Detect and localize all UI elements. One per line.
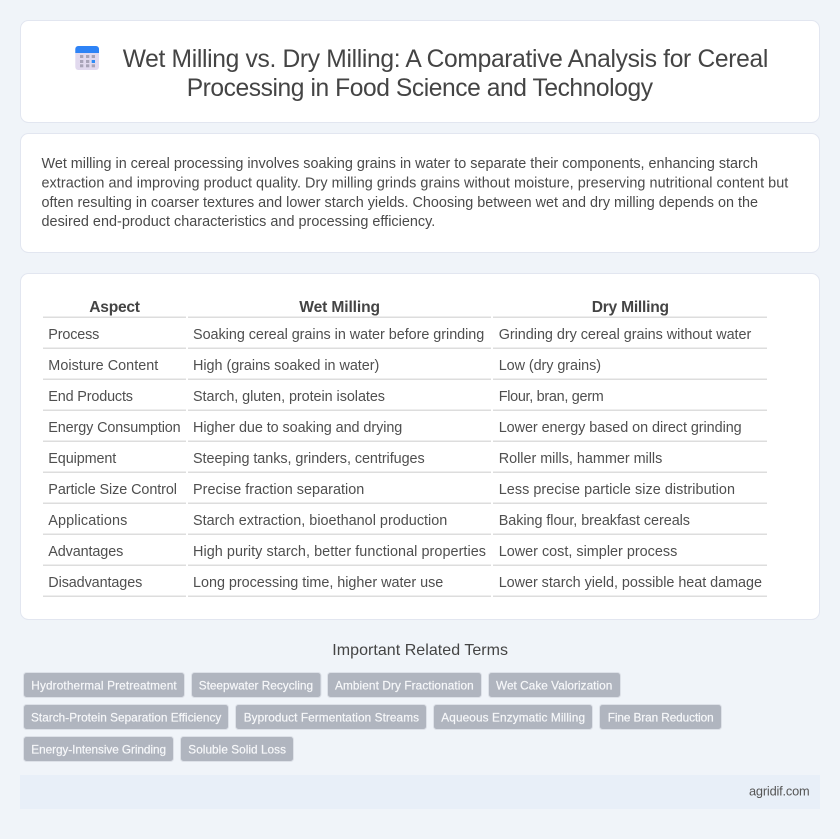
row: Energy Consumption: Energy Consumption <box>48 420 181 436</box>
row: End Products <box>43 389 767 411</box>
row: Equipment: Steeping tanks, grinders, centrifuges <box>193 451 425 467</box>
text block: intro paragraph: extraction and improving product quality. Dry milling grinds grains without moisture, preserving nutritional content but <box>42 176 788 192</box>
tag: Aqueous Enzymatic Milling <box>434 704 592 730</box>
panel: header <box>20 20 820 122</box>
text block: intro paragraph: Wet milling in cereal processing involves soaking grains in water to separate their components, enhancing starch <box>42 156 758 172</box>
tag list: related terms <box>24 672 722 762</box>
row: Particle Size Control: Particle Size Control <box>48 482 177 498</box>
row: Energy Consumption: Higher due to soaking and drying <box>193 420 402 436</box>
row: Energy Consumption: Lower energy based on direct grinding <box>499 420 742 436</box>
table header row: Aspect <box>89 299 140 316</box>
table header row: Dry Milling <box>592 299 669 316</box>
row: Applications <box>43 513 767 535</box>
row: Advantages: Advantages <box>48 544 123 560</box>
row: Equipment: Roller mills, hammer mills <box>499 451 662 467</box>
tag: Wet Cake Valorization <box>488 672 620 698</box>
row: Moisture Content: High (grains soaked in water) <box>193 358 379 374</box>
footer bar <box>20 775 820 809</box>
row: Applications: Baking flour, breakfast cereals <box>499 513 690 529</box>
text block: intro paragraph: often resulting in coarser textures and lower starch yields. Choosing between wet and dry milling depends on the <box>42 195 758 211</box>
row: Applications: Starch extraction, bioethanol production <box>193 513 447 529</box>
row: Applications: Applications <box>48 513 127 529</box>
row: Equipment: Equipment <box>48 451 116 467</box>
icon: calendar <box>75 46 99 70</box>
tag: Soluble Solid Loss: Soluble Solid Loss <box>188 742 286 756</box>
row: End Products: Starch, gluten, protein isolates <box>193 389 385 405</box>
tag: Starch-Protein Separation Efficiency <box>24 704 228 730</box>
title: Wet Milling vs. Dry Milling: A Comparative Analysis for Cereal <box>123 46 768 73</box>
tag: Steepwater Recycling: Steepwater Recycling <box>199 678 313 692</box>
title: Processing in Food Science and Technology <box>187 75 654 102</box>
tag: Fine Bran Reduction <box>600 704 722 730</box>
row: Process: Soaking cereal grains in water before grinding <box>193 327 484 343</box>
tag: Energy-Intensive Grinding: Energy-Intensive Grinding <box>31 742 166 756</box>
text block: intro paragraph <box>42 156 788 230</box>
panel: introduction <box>20 134 820 252</box>
row: Moisture Content: Low (dry grains) <box>499 358 601 374</box>
text block: intro paragraph: desired end-product characteristics and processing efficiency. <box>42 214 435 230</box>
row: Process <box>43 327 767 349</box>
tag: Soluble Solid Loss <box>180 736 294 762</box>
row: Disadvantages: Lower starch yield, possible heat damage <box>499 575 762 591</box>
tag: Aqueous Enzymatic Milling: Aqueous Enzymatic Milling <box>441 710 585 724</box>
tag: Ambient Dry Fractionation: Ambient Dry Fractionation <box>335 678 474 692</box>
tag: Ambient Dry Fractionation <box>328 672 482 698</box>
tag: Steepwater Recycling <box>192 672 321 698</box>
tag: Fine Bran Reduction: Fine Bran Reduction <box>608 710 714 724</box>
row: Particle Size Control <box>43 482 767 504</box>
table header row: Wet Milling <box>299 299 380 316</box>
tag: Byproduct Fermentation Streams <box>236 704 426 730</box>
row: Advantages: High purity starch, better functional properties <box>193 544 486 560</box>
row: Energy Consumption <box>43 420 767 442</box>
tag: Hydrothermal Pretreatment <box>24 672 184 698</box>
row: Process: Grinding dry cereal grains without water <box>499 327 752 343</box>
tag: Wet Cake Valorization: Wet Cake Valorization <box>496 678 612 692</box>
tag: Energy-Intensive Grinding <box>24 736 174 762</box>
tag: Byproduct Fermentation Streams: Byproduct Fermentation Streams <box>244 710 419 724</box>
row: Advantages <box>43 544 767 566</box>
row: Moisture Content: Moisture Content <box>48 358 158 374</box>
footer source text: agridif.com <box>749 784 810 799</box>
row: Advantages: Lower cost, simpler process <box>499 544 677 560</box>
row: Disadvantages <box>43 575 767 597</box>
row: Equipment <box>43 451 767 473</box>
row: End Products: Flour, bran, germ <box>499 389 604 405</box>
tag: Hydrothermal Pretreatment: Hydrothermal Pretreatment <box>31 678 177 692</box>
row: Process: Process <box>48 327 99 343</box>
row: End Products: End Products <box>48 389 133 405</box>
table header row <box>43 299 767 318</box>
row: Particle Size Control: Less precise particle size distribution <box>499 482 735 498</box>
row: Disadvantages: Long processing time, higher water use <box>193 575 443 591</box>
panel: comparison table <box>20 274 820 620</box>
heading: related terms: Important Related Terms <box>332 642 508 659</box>
row: Disadvantages: Disadvantages <box>48 575 142 591</box>
title <box>123 46 768 102</box>
row: Particle Size Control: Precise fraction separation <box>193 482 364 498</box>
tag: Starch-Protein Separation Efficiency: Starch-Protein Separation Efficiency <box>31 710 221 724</box>
row: Moisture Content <box>43 358 767 380</box>
